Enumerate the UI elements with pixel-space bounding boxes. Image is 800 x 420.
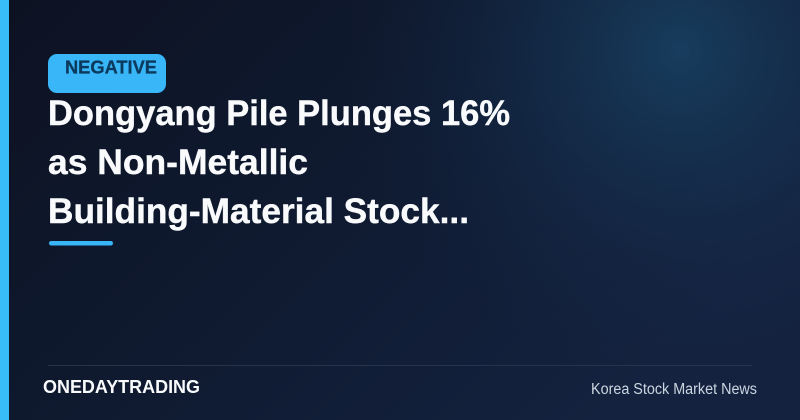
- brand name: ONEDAYTRADING: [43, 377, 200, 397]
- footer tagline: Korea Stock Market News: [591, 381, 757, 398]
- footer divider: [48, 365, 752, 366]
- sentiment badge: NEGATIVE: [65, 58, 157, 78]
- title: [48, 94, 510, 231]
- title underline: [49, 241, 113, 246]
- sentiment badge: [48, 54, 166, 93]
- left accent bar: [0, 0, 9, 420]
- title: as Non-Metallic: [48, 143, 308, 182]
- title: Dongyang Pile Plunges 16%: [48, 94, 510, 133]
- title: Building-Material Stock...: [48, 192, 469, 231]
